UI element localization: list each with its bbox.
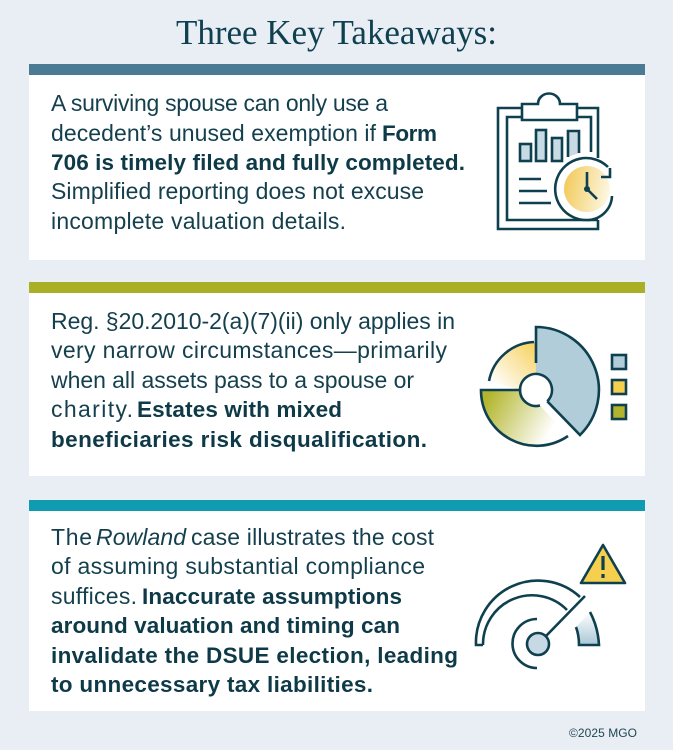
text block: rowland takeaway: to unnecessary tax liabilities. bbox=[51, 672, 373, 697]
text block: form 706 takeaway: 706 is timely filed and fully completed. bbox=[51, 150, 465, 175]
icon: clipboard with chart and clock bbox=[498, 94, 612, 229]
panel accent bar: teal bbox=[29, 500, 645, 511]
text block: rowland takeaway bbox=[51, 524, 458, 697]
panel accent bar: slate blue bbox=[29, 64, 645, 75]
text block: regulation takeaway: when all assets pass to a spouse or bbox=[50, 367, 414, 393]
text block: rowland takeaway: invalidate the DSUE election, leading bbox=[51, 643, 458, 668]
icon: donut chart with legend bbox=[481, 327, 626, 446]
text block: rowland takeaway: suffices. bbox=[51, 583, 137, 609]
text block: form 706 takeaway bbox=[51, 90, 465, 234]
text block: form 706 takeaway: incomplete valuation details. bbox=[51, 208, 346, 234]
text block: regulation takeaway: charity. bbox=[51, 396, 133, 422]
text block: rowland takeaway: around valuation and timing can bbox=[51, 613, 400, 638]
panel: rowland bbox=[29, 500, 645, 711]
text block: rowland takeaway: of assuming substantial compliance bbox=[51, 553, 425, 579]
icon: gauge with warning triangle bbox=[476, 545, 625, 668]
text block: rowland takeaway: Rowland bbox=[96, 524, 187, 550]
text block: regulation takeaway: beneficiaries risk disqualification. bbox=[51, 427, 427, 452]
text block: form 706 takeaway: Form bbox=[382, 121, 437, 146]
panel: form 706 bbox=[29, 64, 645, 260]
panel accent bar: olive bbox=[29, 282, 645, 293]
text block: form 706 takeaway: A surviving spouse can only use a bbox=[51, 90, 388, 116]
title: Three Key Takeaways: bbox=[176, 13, 497, 52]
text block: rowland takeaway: The bbox=[51, 524, 92, 550]
text block: regulation takeaway: Estates with mixed bbox=[137, 397, 342, 422]
text block: rowland takeaway: case illustrates the cost bbox=[191, 524, 435, 550]
copyright: ©2025 MGO bbox=[569, 726, 637, 740]
text block: regulation takeaway: Reg. §20.2010-2(a)(7)(ii) only applies in bbox=[51, 308, 455, 334]
text block: form 706 takeaway: decedent’s unused exemption if bbox=[51, 120, 377, 146]
text block: form 706 takeaway: Simplified reporting does not excuse bbox=[51, 178, 424, 204]
panel: regulation bbox=[29, 282, 645, 476]
text block: regulation takeaway: very narrow circumstances—primarily bbox=[51, 337, 448, 363]
text block: regulation takeaway bbox=[50, 308, 455, 452]
text block: rowland takeaway: Inaccurate assumptions bbox=[142, 584, 402, 609]
